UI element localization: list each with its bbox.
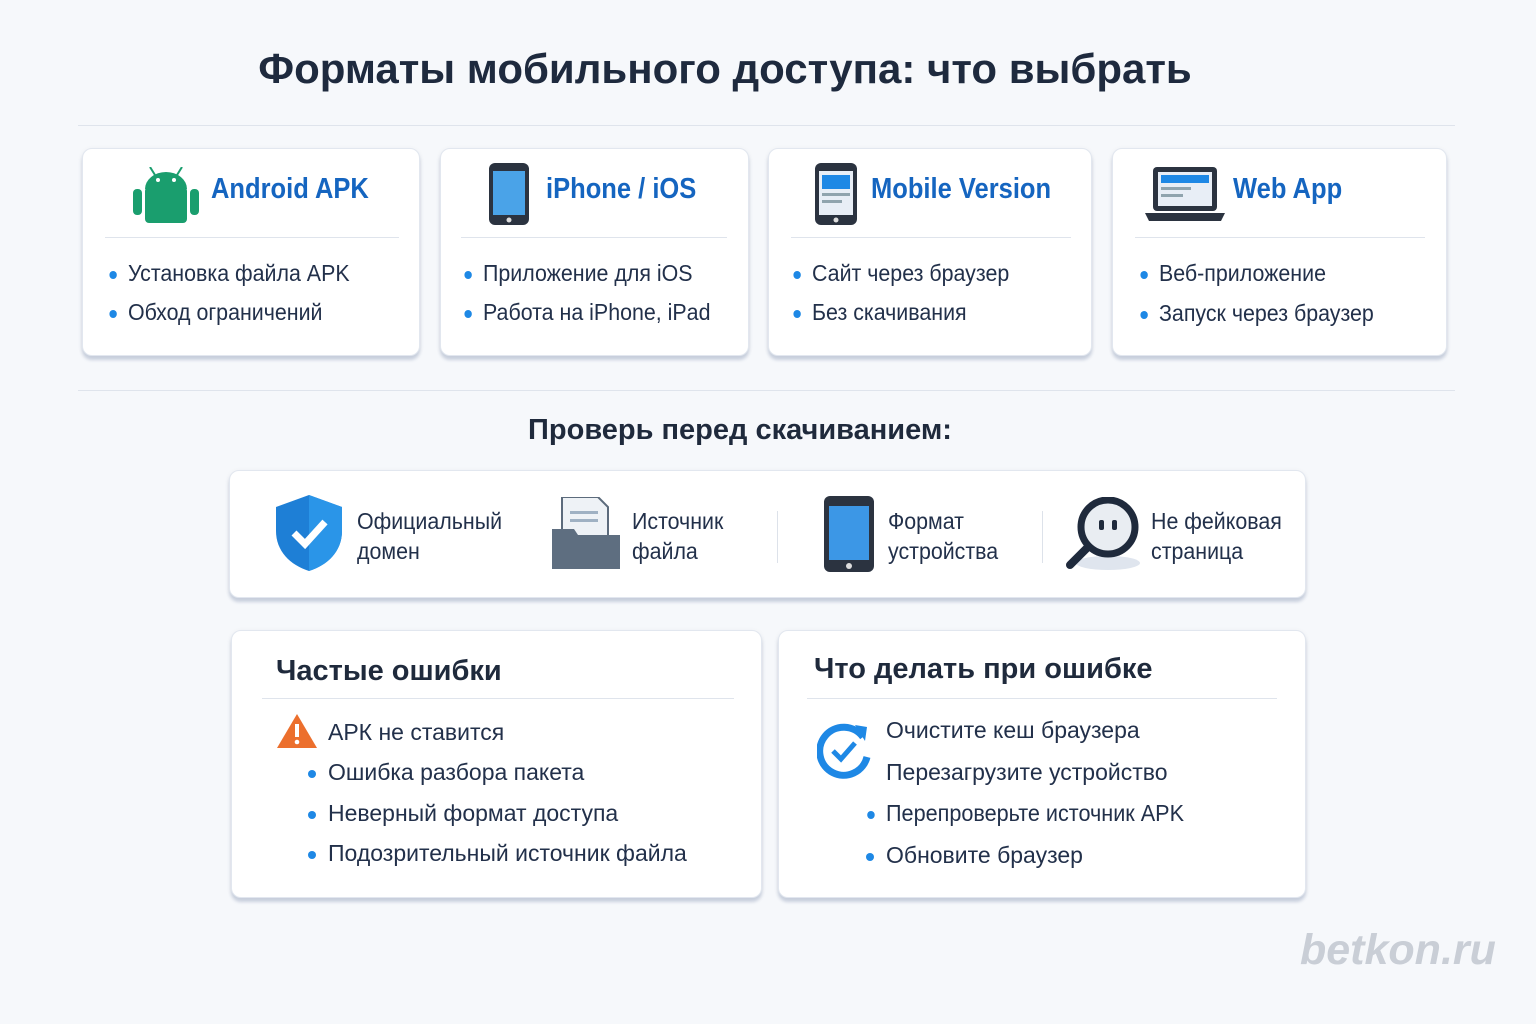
check: domain <box>276 495 502 571</box>
error list: АРК не ставится <box>328 719 504 745</box>
check: device: Формат <box>888 508 964 534</box>
panel: common errors <box>231 630 762 898</box>
action list: Обновите браузер <box>886 842 1083 868</box>
bullets: Веб-приложение <box>1159 260 1326 286</box>
card: Mobile Version: Без скачивания <box>812 299 967 325</box>
check: not fake: страница <box>1151 538 1243 564</box>
icon: warning <box>277 714 317 748</box>
error list: Неверный формат доступа <box>328 800 618 826</box>
bullets: Установка файла APK <box>128 260 350 286</box>
title: Форматы мобильного доступа: что выбрать <box>258 45 1192 92</box>
icon: refresh check <box>817 724 870 779</box>
error list: Подозрительный источник файла <box>328 840 687 866</box>
check: not fake: Не фейковая <box>1151 508 1282 534</box>
icon: phone <box>489 163 529 225</box>
check: file source <box>552 497 724 569</box>
error list <box>308 719 687 866</box>
card: Web App <box>1112 148 1447 356</box>
heading: Android APK <box>211 173 369 205</box>
card: Android APK: Обход ограничений <box>128 299 322 325</box>
card: Web App: Запуск через браузер <box>1159 300 1374 326</box>
icon: android <box>133 167 199 223</box>
bullets: Приложение для iOS <box>483 260 693 286</box>
heading: Что делать при ошибке <box>814 653 1153 685</box>
bullets: Сайт через браузер <box>812 260 1009 286</box>
action list: Перепроверьте источник APK <box>886 800 1184 826</box>
card: iPhone: Работа на iPhone, iPad <box>483 299 710 325</box>
action list <box>866 717 1184 868</box>
subheading: Проверь перед скачиванием: <box>528 414 952 446</box>
card: iPhone <box>440 148 749 356</box>
card: Android APK <box>82 148 420 356</box>
card: Mobile Version <box>768 148 1092 356</box>
panel: checks <box>229 470 1306 598</box>
check: domain: Официальный <box>357 508 502 534</box>
check: device <box>824 496 998 572</box>
heading: iPhone / iOS <box>546 173 696 205</box>
panel: what to do <box>778 630 1306 898</box>
heading: Частые ошибки <box>276 655 502 687</box>
error list: Ошибка разбора пакета <box>328 759 584 785</box>
check: domain: домен <box>357 538 420 564</box>
check: not fake <box>1066 497 1282 570</box>
icon: mobile site <box>815 163 857 225</box>
action list: Перезагрузите устройство <box>886 759 1168 785</box>
icon: laptop <box>1145 167 1225 221</box>
action list: Очистите кеш браузера <box>886 717 1140 743</box>
check: device: устройства <box>888 538 998 564</box>
heading: Web App <box>1233 173 1342 205</box>
watermark: betkon.ru <box>1300 926 1496 974</box>
heading: Mobile Version <box>871 173 1051 205</box>
check: file source: Источник <box>632 508 723 534</box>
check: file source: файла <box>632 538 698 564</box>
